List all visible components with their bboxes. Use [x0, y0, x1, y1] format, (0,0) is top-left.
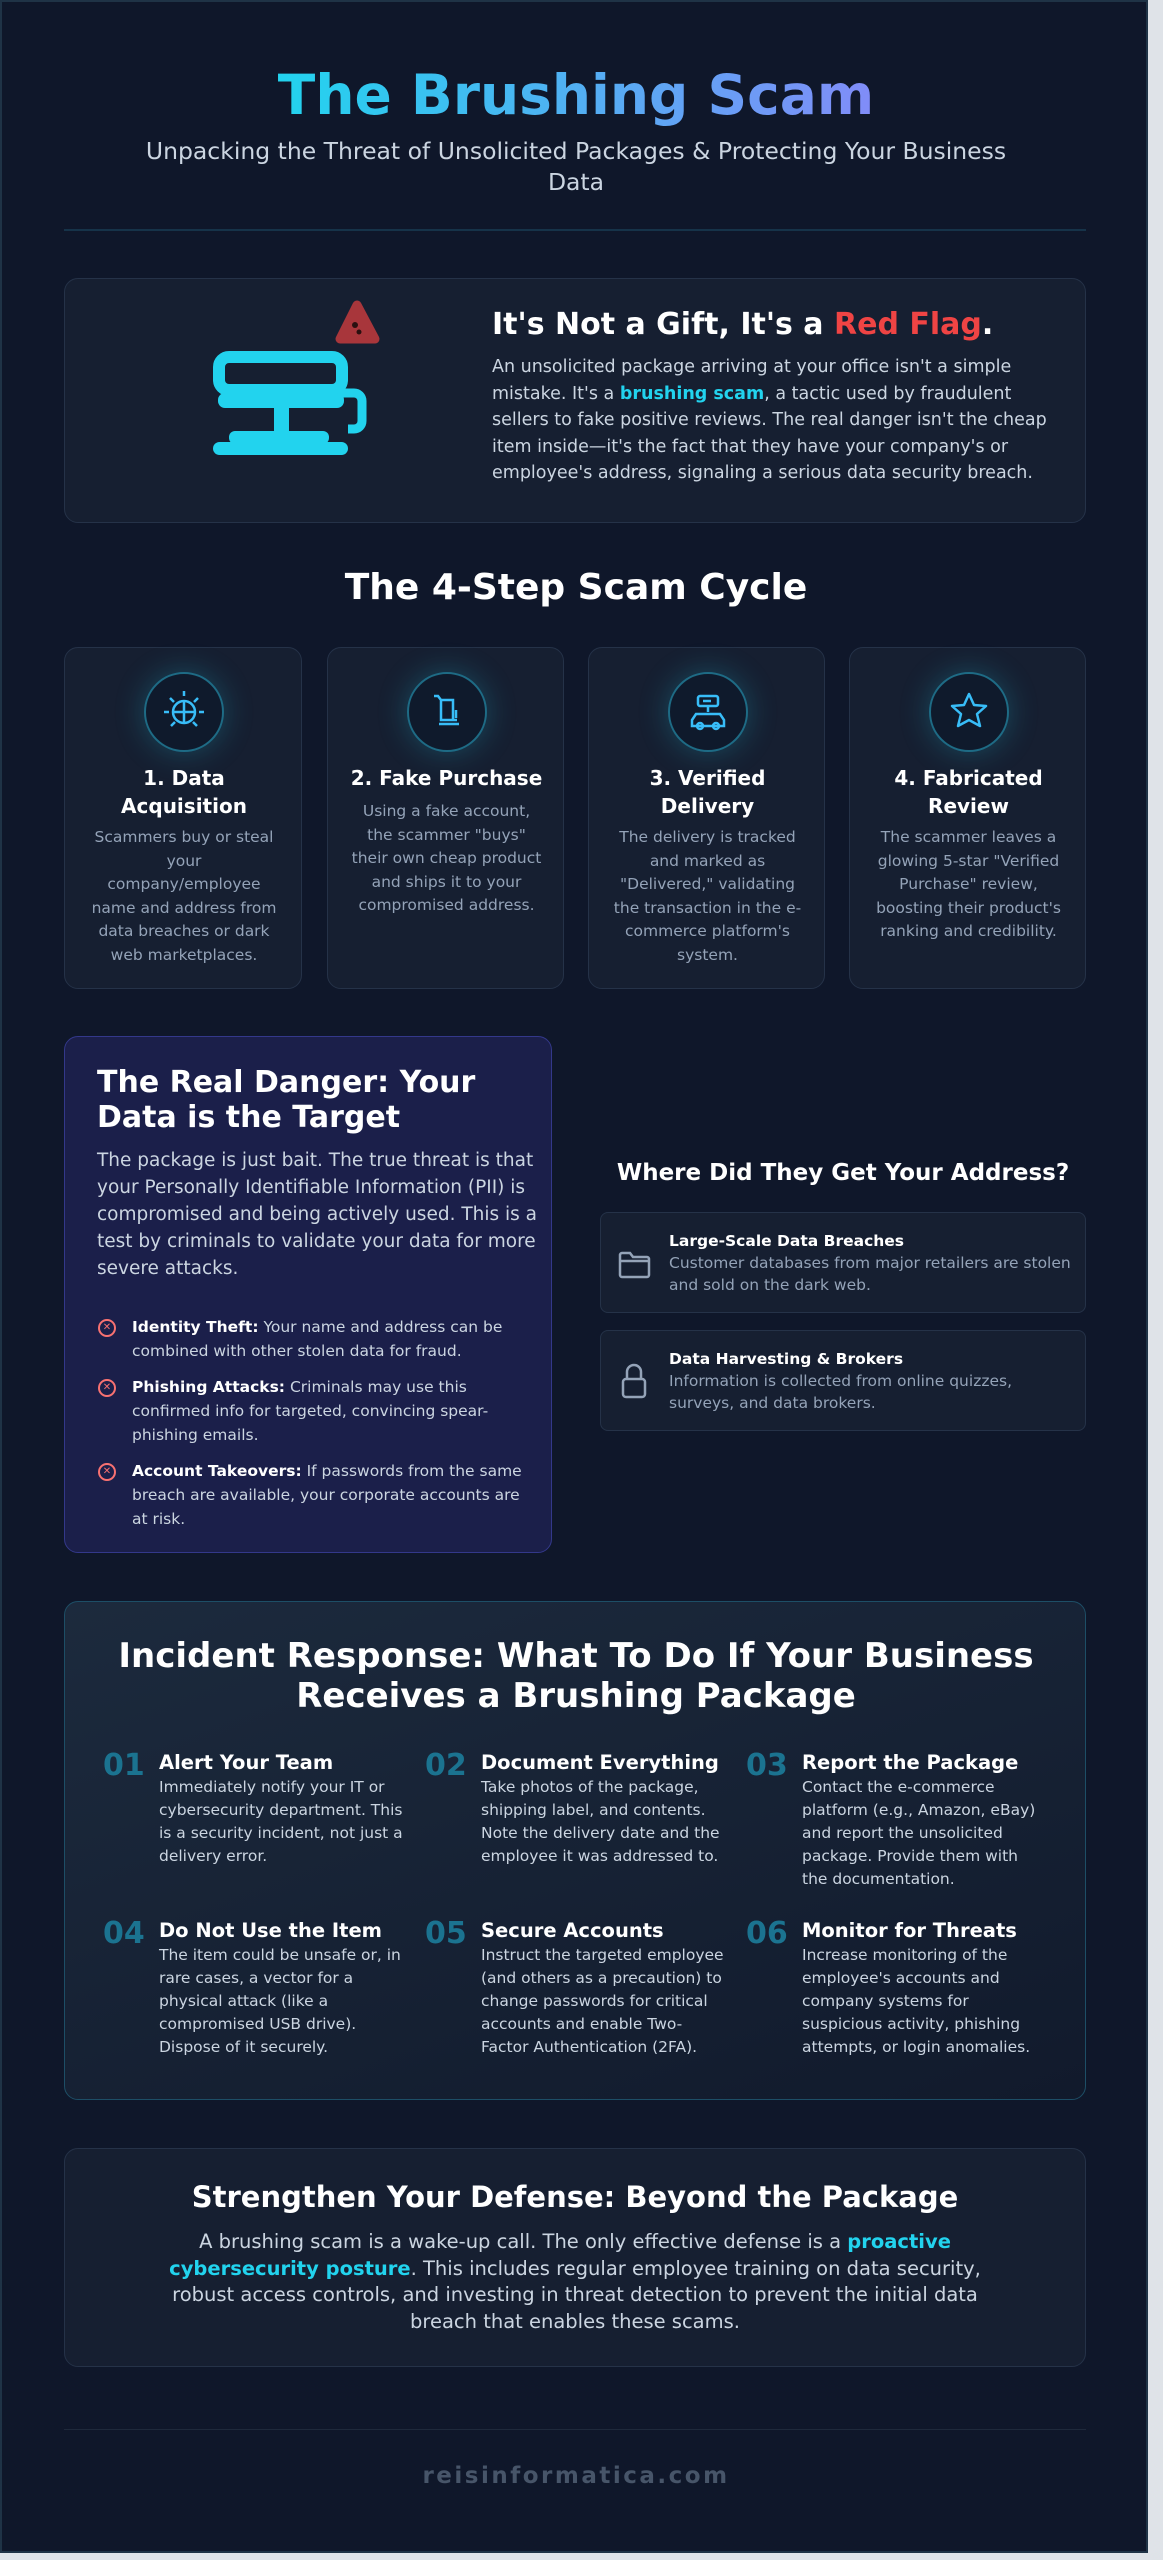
step grid: 06: [746, 1916, 788, 1951]
step text: The scammer leaves a glowing 5-star "Verified Purchase" review, boosting their product's ranking and credibility.: [876, 828, 1061, 940]
step title: 3. Verified Delivery: [650, 766, 765, 818]
bullet list: [98, 1318, 522, 1528]
subtitle: Unpacking the Threat of Unsolicited Packages & Protecting Your Business Data: [146, 137, 1006, 196]
step grid: Monitor for Threats: [802, 1919, 1017, 1942]
panel: red flag intro: [64, 278, 1086, 523]
step 03: [746, 1748, 1035, 1888]
panel: real danger: [64, 1036, 552, 1553]
panel: incident response: [64, 1601, 1086, 2100]
panel: step 2: [327, 647, 564, 989]
step grid: Instruct the targeted employee (and others as a precaution) to change passwords for critical accounts and enable Two-Factor Authentication (2FA).: [481, 1946, 724, 2056]
footer: reisinformatica.com: [422, 2463, 730, 2489]
step text: Using a fake account, the scammer "buys" their own cheap product and ships it to your compromised address.: [352, 802, 541, 914]
bullet: account takeovers: ✕: [103, 1466, 111, 1477]
heading: Strengthen Your Defense: Beyond the Package: [192, 2180, 958, 2214]
step grid: Take photos of the package, shipping label, and contents. Note the delivery date and the employee it was addressed to.: [481, 1778, 720, 1865]
step grid: Contact the e-commerce platform (e.g., Amazon, eBay) and report the unsolicited package. Provide them with the documentation.: [802, 1778, 1035, 1888]
step grid: Alert Your Team: [159, 1751, 333, 1774]
heading: Incident Response: What To Do If Your Business Receives a Brushing Package: [118, 1636, 1034, 1716]
text block: The package is just bait. The true threat is that your Personally Identifiable Information (PII) is compromised and being actively used. This is a test by criminals to validate your data for more severe attacks.: [97, 1150, 537, 1279]
source text: Data Harvesting & Brokers: [669, 1350, 903, 1368]
step 05: [425, 1916, 724, 2056]
step grid: 03: [746, 1748, 788, 1783]
icon: folder: [618, 1252, 650, 1278]
step 06: [746, 1916, 1030, 2056]
icon: lock: [622, 1364, 646, 1398]
panel: step 4: [849, 647, 1086, 989]
source text: Information is collected from online quizzes, surveys, and data brokers.: [669, 1372, 1012, 1412]
bullet: phishing: Phishing Attacks: Criminals may use this confirmed info for targeted, convincing spear-phishing emails.: [132, 1378, 488, 1444]
step grid: Document Everything: [481, 1751, 719, 1774]
step grid: 05: [425, 1916, 467, 1951]
heading: 4-step cycle: The 4-Step Scam Cycle: [345, 567, 807, 608]
step grid: 04: [103, 1916, 145, 1951]
panel: step 1: [64, 647, 302, 989]
text block: An unsolicited package arriving at your office isn't a simple mistake. It's a brushing scam, a tactic used by fraudulent sellers to fake positive reviews. The real danger isn't the cheap item inside—it's the fact that they have your company's or employee's address, signaling a serious data security breach.: [492, 357, 1047, 483]
step text: The delivery is tracked and marked as "Delivered," validating the transaction in the e-commerce platform's system.: [614, 828, 801, 964]
source text: Customer databases from major retailers are stolen and sold on the dark web.: [669, 1254, 1071, 1294]
panel: data breaches: [600, 1212, 1086, 1313]
panel: step 3: [588, 647, 825, 989]
step 02: [425, 1748, 720, 1865]
step grid: [103, 1748, 1035, 2056]
icon: package monitor: [213, 300, 380, 455]
bullet: phishing: ✕: [103, 1382, 111, 1393]
heading: It's Not a Gift, It's a Red Flag.: [492, 307, 993, 342]
source text: [669, 1350, 1012, 1412]
step title: 1. Data Acquisition: [121, 766, 247, 818]
step 04: [103, 1916, 401, 2056]
heading: where address: Where Did They Get Your Address?: [617, 1160, 1069, 1186]
heading: The Real Danger: Your Data is the Target: [97, 1065, 475, 1135]
step grid: Immediately notify your IT or cybersecurity department. This is a security incident, not just a delivery error.: [159, 1778, 403, 1865]
icon: purchase: [407, 672, 487, 752]
step grid: 02: [425, 1748, 467, 1783]
bullet: account takeovers: Account Takeovers: If passwords from the same breach are available, your corporate accounts are at risk.: [132, 1462, 522, 1528]
step title: 2. Fake Purchase: [351, 766, 542, 790]
title: The Brushing Scam: [278, 63, 874, 127]
step grid: Do Not Use the Item: [159, 1919, 382, 1942]
panel: strengthen defense: [64, 2148, 1086, 2367]
step text: Scammers buy or steal your company/employee name and address from data breaches or dark web marketplaces.: [92, 828, 276, 964]
bullet: identity theft: ✕: [103, 1322, 111, 1333]
step grid: The item could be unsafe or, in rare cases, a vector for a physical attack (like a compromised USB drive). Dispose of it securely.: [159, 1946, 401, 2056]
panel: data brokers: [600, 1330, 1086, 1431]
step 01: [103, 1748, 403, 1865]
icon: star: [929, 672, 1009, 752]
source text: [669, 1232, 1071, 1294]
icon: bug: [144, 672, 224, 752]
step grid: Secure Accounts: [481, 1919, 664, 1942]
step grid: 01: [103, 1748, 145, 1783]
source text: Large-Scale Data Breaches: [669, 1232, 904, 1250]
step grid: Increase monitoring of the employee's accounts and company systems for suspicious activity, phishing attempts, or login anomalies.: [802, 1946, 1030, 2056]
step title: 4. Fabricated Review: [894, 766, 1043, 818]
bullet: identity theft: Identity Theft: Your name and address can be combined with other stolen data for fraud.: [132, 1318, 502, 1360]
step grid: Report the Package: [802, 1751, 1018, 1774]
text block: A brushing scam is a wake-up call. The only effective defense is a proactive cybersecurity posture. This includes regular employee training on data security, robust access controls, and investing in threat detection to prevent the initial data breach that enables these scams.: [169, 2230, 981, 2332]
icon: delivery: [668, 672, 748, 752]
